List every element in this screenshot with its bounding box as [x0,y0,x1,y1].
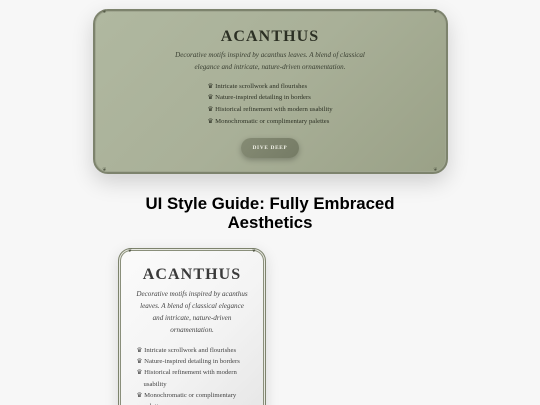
description text: ornamentation. [170,326,214,334]
button: dive deep [241,138,299,158]
page title: Aesthetics [228,213,312,232]
feature list: ♛ Monochromatic or complimentary palettes [208,118,329,125]
ornament: top right: ❦ [433,10,438,14]
panel: light acanthus card [118,248,266,405]
description text: elegance and intricate, nature-driven ornamentation. [194,63,346,71]
description text: Decorative motifs inspired by acanthus [136,290,248,298]
ornament: top right: ❦ [252,249,256,254]
feature list: ♛ Nature-inspired detailing in borders [208,94,311,101]
feature list: ♛ Historical refinement with modern [136,369,237,376]
heading: acanthus: ACANTHUS [221,28,319,44]
description text [136,290,248,334]
ornament: top left: ❦ [128,249,132,254]
description text: Decorative motifs inspired by acanthus leaves. A blend of classical [175,50,365,58]
feature list [208,82,333,125]
description text: and intricate, nature-driven [153,314,231,322]
description text [175,50,365,71]
ornament: bottom right: ❦ [433,168,438,172]
page title: UI Style Guide: Fully Embraced [146,194,394,212]
feature list: usability [144,381,167,388]
feature list: ♛ Nature-inspired detailing in borders [136,358,240,365]
feature list [136,346,240,405]
heading: acanthus: ACANTHUS [143,266,241,283]
feature list: ♛ Intricate scrollwork and flourishes [136,346,236,354]
feature list: ♛ Monochromatic or complimentary [136,392,236,399]
feature list: ♛ Intricate scrollwork and flourishes [208,82,307,90]
panel: dark acanthus card [92,8,448,174]
button: dive deep: DIVE DEEP [253,145,287,151]
description text: leaves. A blend of classical elegance [140,302,244,310]
page title [146,194,394,232]
ornament: bottom left: ❦ [102,168,107,172]
ornament: top left: ❦ [102,10,107,14]
feature list: ♛ Historical refinement with modern usability [208,106,333,113]
